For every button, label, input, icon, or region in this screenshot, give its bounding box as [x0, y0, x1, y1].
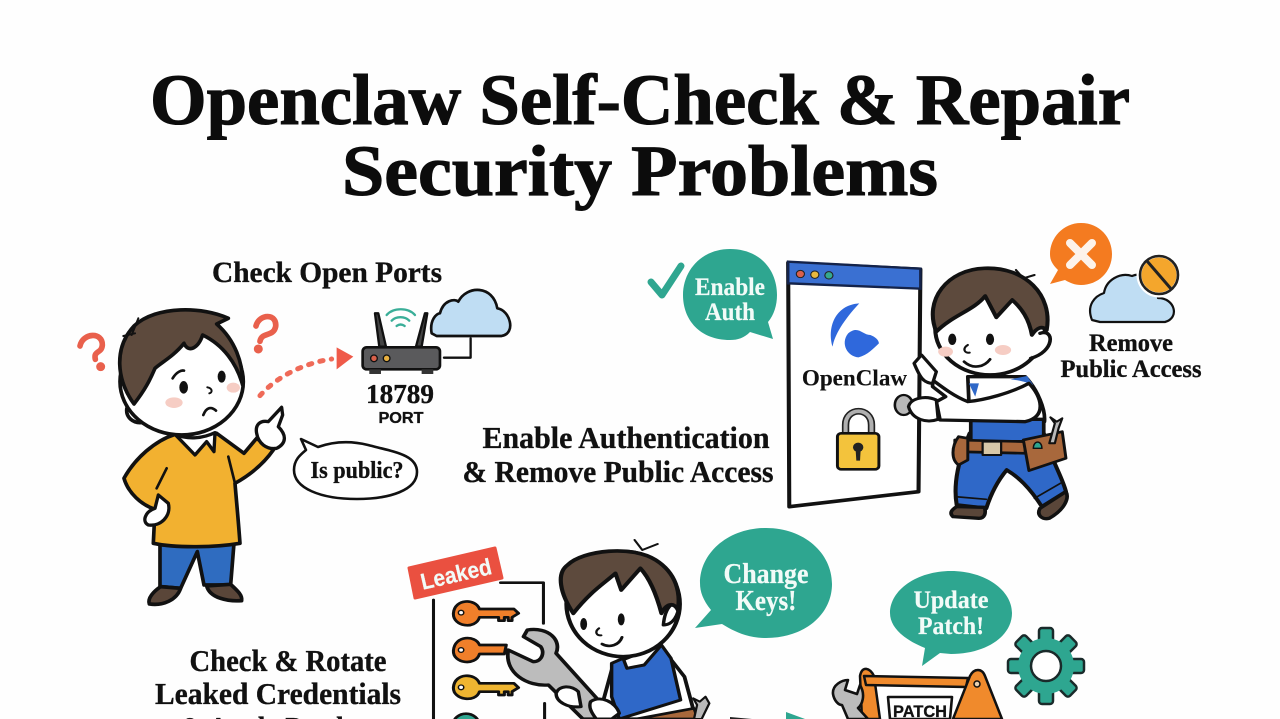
icon: teal key	[453, 714, 479, 719]
icon: question marks	[80, 317, 276, 368]
character: boy with wrench	[508, 540, 709, 719]
label: remove public access: Public Access	[1060, 356, 1202, 383]
panel: check open ports	[80, 256, 510, 604]
callout: is public: Is public?	[310, 458, 404, 484]
callout: update patch	[890, 571, 1012, 666]
heading: check open ports: Check Open Ports	[212, 256, 442, 289]
icon: cloud with no-entry sign	[1090, 255, 1179, 322]
heading: rotate leaked credentials	[155, 643, 401, 719]
heading: rotate leaked credentials: Leaked Credentials	[155, 676, 401, 711]
icon: router and cloud	[363, 290, 510, 374]
icon: gear	[1008, 628, 1084, 704]
panel: enable authentication	[462, 223, 1202, 519]
icon: orange key	[453, 601, 519, 625]
icon: padlock	[837, 411, 879, 469]
callout: enable auth	[683, 249, 777, 340]
credentials sheet with keys	[433, 583, 545, 719]
label: port number: PORT	[378, 410, 424, 427]
character: repair boy pushing window	[895, 268, 1067, 519]
label: port number	[366, 379, 434, 427]
label: remove public access: Remove	[1089, 330, 1173, 357]
heading: enable authentication: Enable Authentication	[482, 420, 770, 455]
callout: enable auth: Auth	[705, 299, 755, 326]
callout: enable auth: Enable	[695, 274, 765, 301]
title	[150, 60, 1130, 211]
panel: rotate credentials	[155, 528, 832, 719]
callout: is public	[294, 439, 417, 499]
heading: enable authentication	[462, 420, 774, 489]
badge: leaked: Leaked	[418, 553, 494, 595]
callout: orange x	[1050, 223, 1112, 285]
icon: patch toolkit	[833, 669, 1002, 719]
icon: check mark	[651, 266, 681, 295]
callout: update patch: Update	[914, 587, 988, 614]
icon: openclaw logo	[831, 303, 879, 357]
title: Openclaw Self-Check & Repair	[150, 60, 1130, 140]
arrow: dotted to router	[260, 347, 353, 396]
window: openclaw app: OpenClaw	[802, 366, 907, 391]
callout: change keys: Change	[724, 558, 809, 590]
icon: orange key partly hidden	[453, 638, 506, 662]
callout: change keys: Keys!	[736, 585, 796, 617]
character: confused boy	[120, 310, 284, 604]
heading: rotate leaked credentials: Check & Rotate	[190, 643, 386, 678]
panel: apply patch	[730, 571, 1084, 719]
label: port number: 18789	[366, 379, 434, 409]
heading: enable authentication: & Remove Public Access	[462, 454, 774, 489]
callout: change keys	[695, 528, 832, 638]
arrow: to patch kit	[730, 712, 805, 719]
label: remove public access	[1060, 330, 1202, 383]
callout: update patch: Patch!	[918, 613, 984, 640]
window: openclaw app	[788, 262, 920, 507]
icon: yellow key	[453, 676, 519, 699]
icon: wrench	[508, 629, 615, 719]
title: Security Problems	[342, 131, 938, 211]
